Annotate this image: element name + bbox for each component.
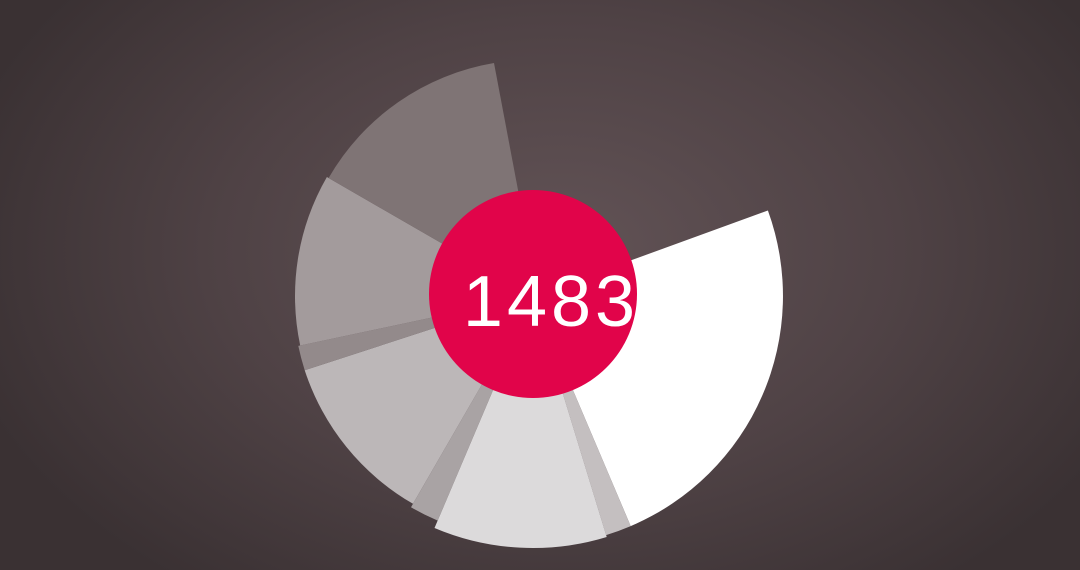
segment: light gray bottom bbox=[434, 296, 607, 548]
segment: sliver light bbox=[533, 296, 631, 535]
segment: sliver gray bbox=[411, 296, 533, 521]
segment: white bbox=[533, 210, 783, 526]
segment: dark top bbox=[329, 63, 533, 296]
center circle with value bbox=[429, 190, 639, 398]
segment: medium gray bbox=[305, 296, 533, 504]
segment: gray left bbox=[295, 177, 533, 346]
center circle with value: 1483 bbox=[463, 262, 639, 342]
segment: sliver dark bbox=[298, 296, 533, 370]
